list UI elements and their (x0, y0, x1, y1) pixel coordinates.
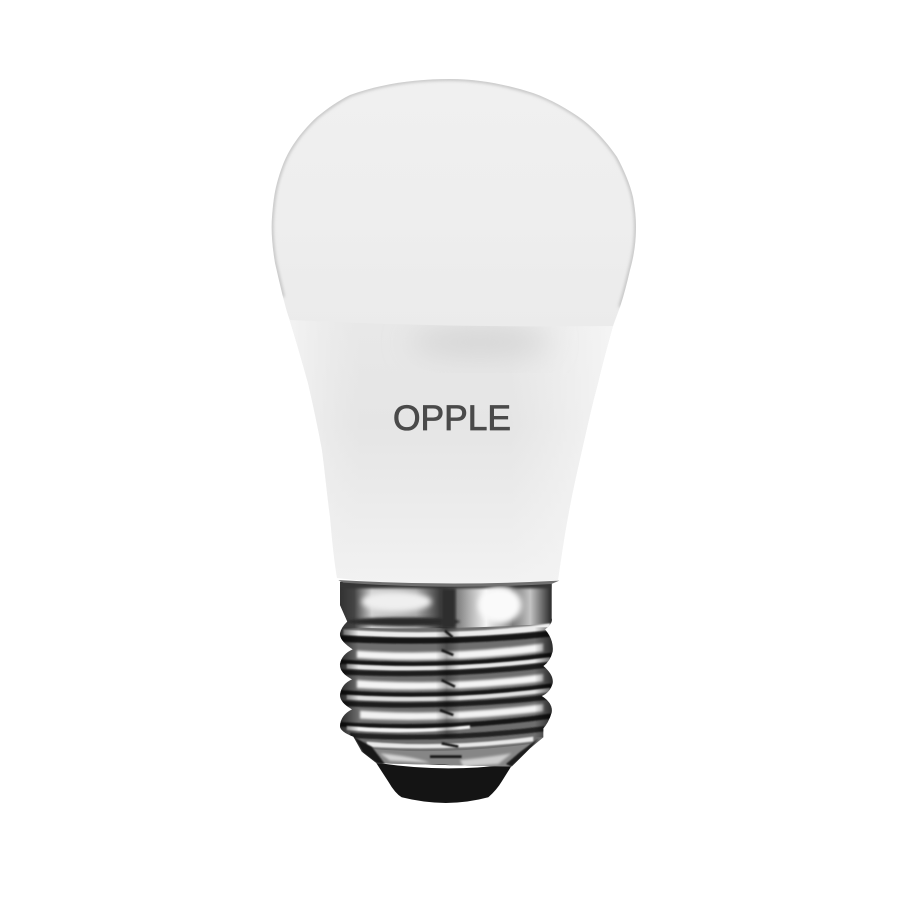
thread 1 (343, 623, 550, 637)
thread run-out (347, 725, 470, 732)
side and seam shading (337, 627, 557, 737)
metal threads (337, 580, 557, 770)
screw base (337, 580, 559, 803)
product photo: LED bulb (272, 79, 636, 803)
thread 2 (347, 657, 550, 671)
bulb body (289, 318, 614, 586)
brand logo: OPPLE (393, 399, 511, 438)
thread 3 (347, 688, 550, 701)
collar top edge (338, 580, 559, 587)
shadow under dome (410, 328, 550, 356)
black insulator tip (376, 763, 513, 803)
bulb dome (265, 75, 640, 330)
collar band (337, 582, 557, 628)
